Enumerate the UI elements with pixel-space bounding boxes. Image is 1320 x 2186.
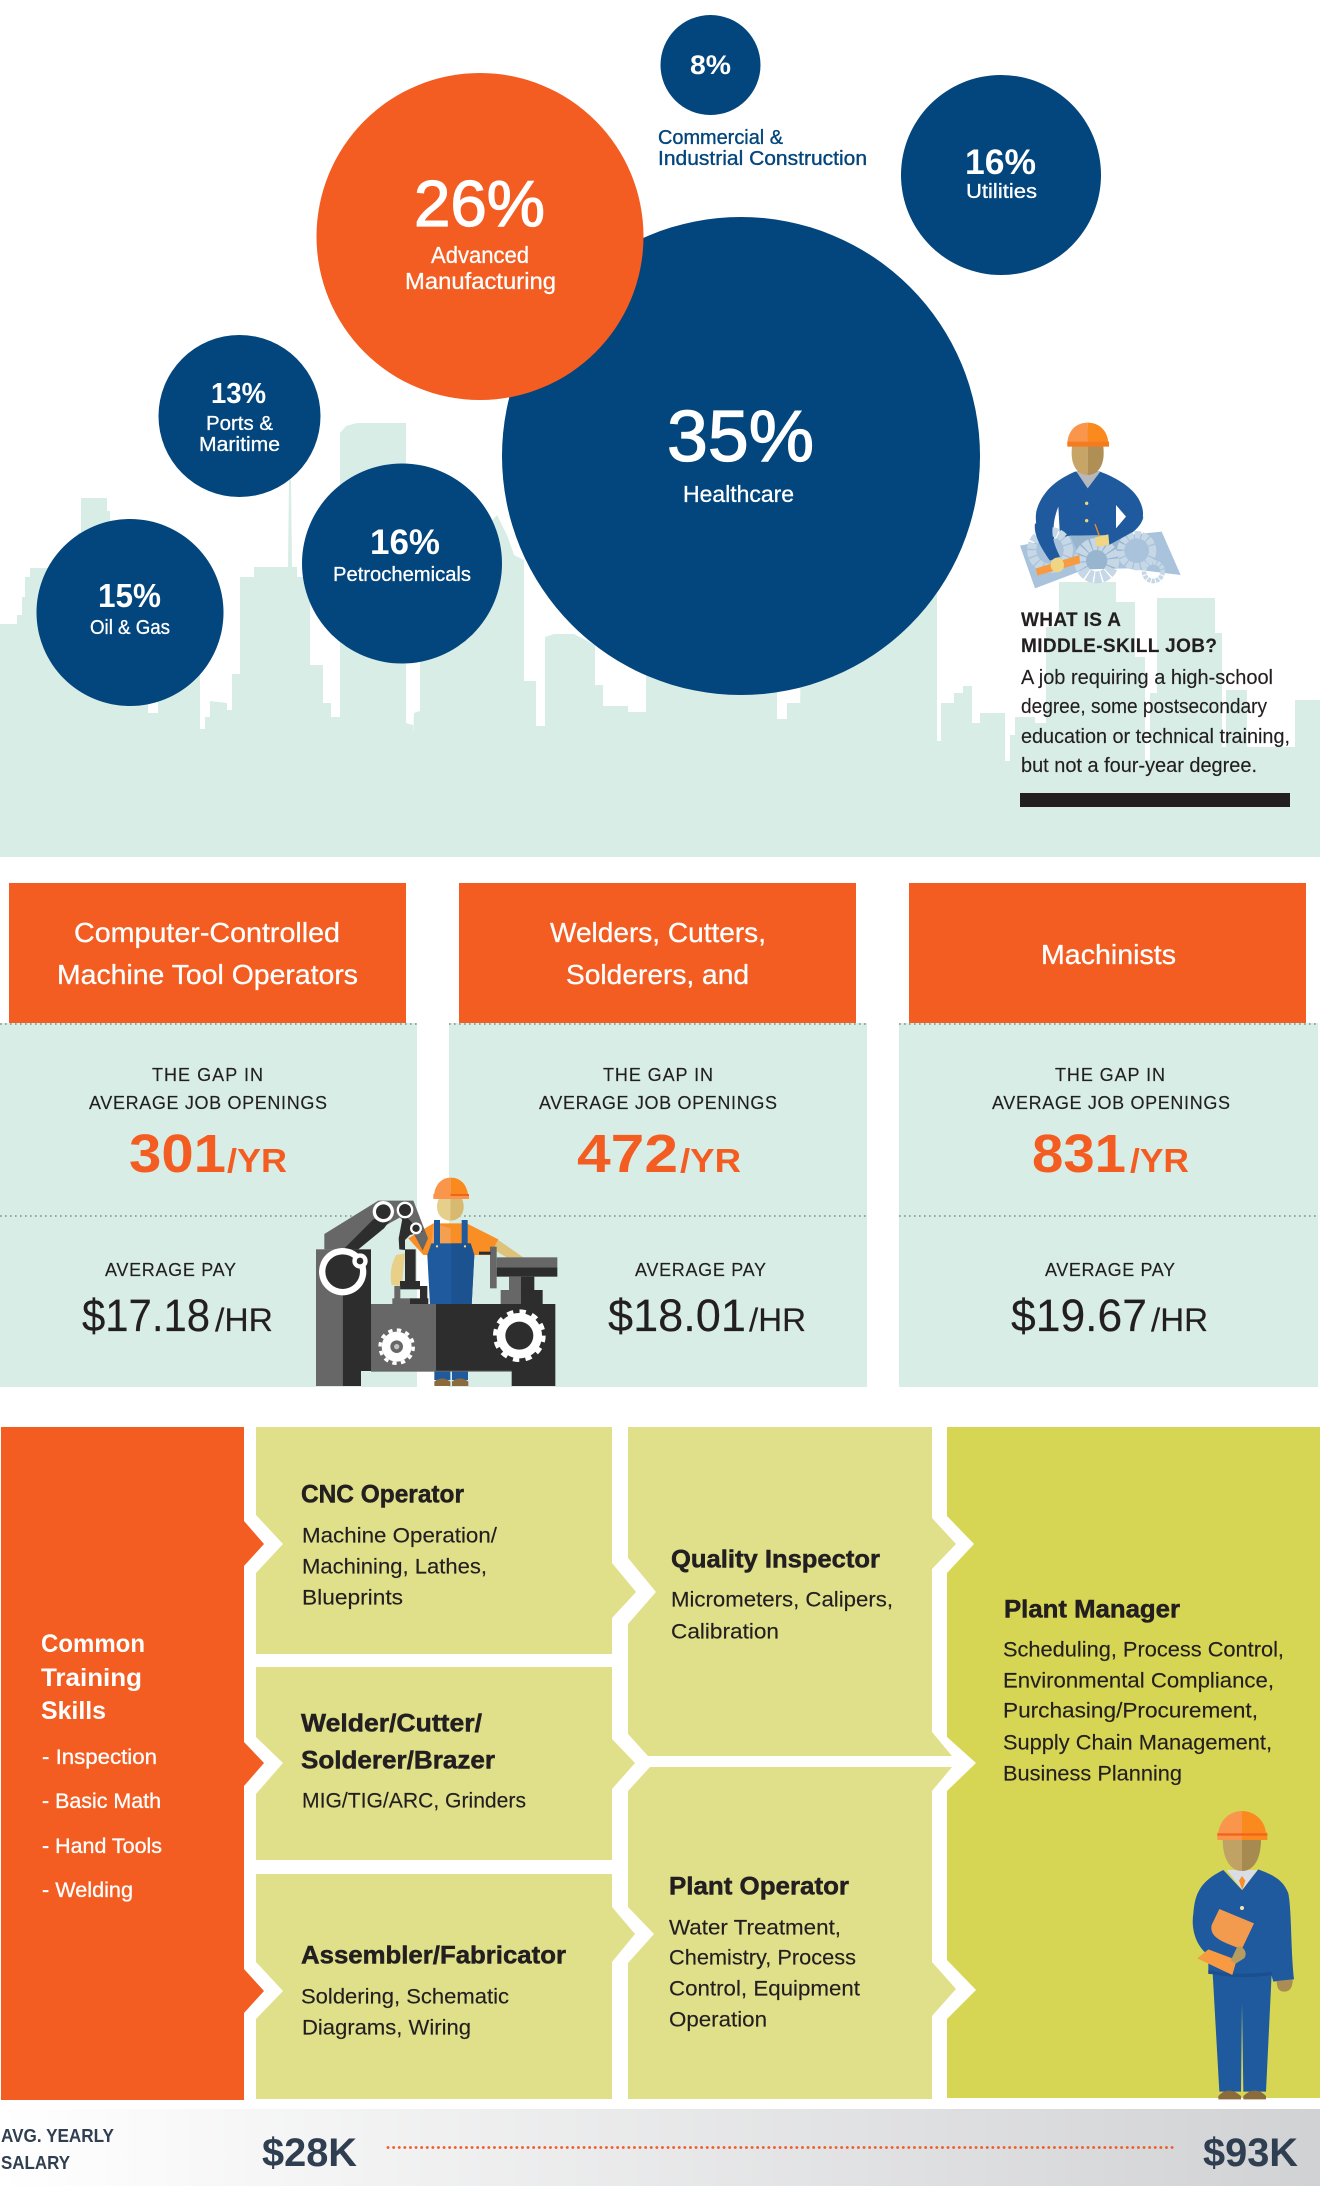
city skyline background (0, 423, 1320, 857)
bubble: Utilities 16%: Utilities (966, 181, 1037, 203)
panel: Machinists: AVERAGE JOB OPENINGS (992, 1093, 1230, 1113)
bubble: Oil and Gas 15% (36, 519, 224, 706)
panel: Assembler/Fabricator (256, 1874, 635, 2099)
panel: Computer-Controlled Machine Tool Operators: THE GAP IN (152, 1065, 263, 1085)
panel: Computer-Controlled Machine Tool Operators (0, 883, 417, 1387)
panel: common training skills: - Inspection (42, 1745, 157, 1769)
panel: Machinists: /HR (1151, 1302, 1208, 1338)
bubble: Utilities 16% (901, 75, 1101, 275)
callout: what is a middle-skill job (1020, 610, 1290, 807)
bubble: Ports and Maritime 13%: Ports & (206, 413, 274, 435)
bubble: Petrochemicals 16%: 16% (370, 523, 440, 562)
panel: CNC Operator: Machine Operation/ (302, 1523, 497, 1547)
salary bar: $93K (1203, 2131, 1298, 2175)
salary bar: $28K (262, 2131, 357, 2175)
panel: common training skills: - Hand Tools (42, 1834, 162, 1858)
panel: common training skills: - Welding (42, 1878, 133, 1902)
panel: Quality Inspector (628, 1427, 956, 1756)
callout: what is a middle-skill job: WHAT IS A (1021, 610, 1121, 631)
callout: what is a middle-skill job: education or technical training, (1021, 726, 1290, 748)
panel: Welder/Cutter/Solderer/Brazer: Welder/Cutter/ (301, 1709, 482, 1737)
panel: Computer-Controlled Machine Tool Operators: /YR (227, 1142, 287, 1179)
bubble: Advanced Manufacturing 26%: Advanced (431, 242, 529, 268)
panel: Machinists: Machinists (1041, 939, 1176, 970)
panel: Welder/Cutter/Solderer/Brazer: MIG/TIG/ARC, Grinders (302, 1788, 526, 1812)
panel: Assembler/Fabricator: Assembler/Fabricator (301, 1941, 566, 1969)
bubble: Commercial and Industrial Construction 8%: 8% (690, 50, 731, 80)
panel: CNC Operator: Blueprints (302, 1585, 403, 1609)
panel: Computer-Controlled Machine Tool Operators: AVERAGE JOB OPENINGS (89, 1093, 327, 1113)
salary bar: SALARY (1, 2153, 70, 2173)
panel: Computer-Controlled Machine Tool Operators: 301 (129, 1124, 226, 1184)
bubble: Healthcare 35%: Healthcare (683, 481, 794, 507)
bubble: Utilities 16%: 16% (965, 143, 1036, 182)
callout: what is a middle-skill job: but not a four-year degree. (1021, 755, 1257, 777)
panel: Welders, Cutters, Solderers: 472 (577, 1124, 678, 1184)
panel: Welder/Cutter/Solderer/Brazer (256, 1667, 635, 1860)
bubble: Ports and Maritime 13% (158, 335, 320, 497)
panel: Plant Manager: Environmental Compliance, (1003, 1668, 1274, 1692)
panel: Computer-Controlled Machine Tool Operators: Machine Tool Operators (57, 959, 358, 990)
panel: Quality Inspector: Calibration (671, 1619, 779, 1643)
bubble: Petrochemicals 16% (302, 464, 502, 664)
icon: worker reading blueprint (1020, 423, 1181, 588)
salary bar: AVG. YEARLY (1, 2126, 114, 2146)
bubble: Commercial and Industrial Construction 8%: Commercial & (658, 127, 784, 149)
panel: Plant Manager: Scheduling, Process Control, (1003, 1637, 1284, 1661)
bubble: Advanced Manufacturing 26% (316, 73, 644, 400)
panel: Machinists (899, 883, 1318, 1387)
panel: Welders, Cutters, Solderers: AVERAGE PAY (635, 1260, 766, 1280)
panel: Computer-Controlled Machine Tool Operators: $17.18 (82, 1290, 210, 1341)
panel: Plant Operator: Water Treatment, (669, 1915, 841, 1939)
bubble: Healthcare 35% (502, 217, 980, 695)
icon: plant manager figure (1193, 1811, 1294, 2099)
panel: Machinists: THE GAP IN (1055, 1065, 1165, 1085)
callout: what is a middle-skill job: degree, some postsecondary (1021, 696, 1267, 718)
panel: Plant Manager: Business Planning (1003, 1761, 1182, 1785)
panel: Welders, Cutters, Solderers: /YR (680, 1142, 741, 1179)
bubble: Commercial and Industrial Construction 8%: Industrial Construction (658, 148, 867, 170)
panel: common training skills (1, 1427, 264, 2100)
panel: Welders, Cutters, Solderers: Solderers, and (566, 959, 749, 990)
panel: CNC Operator: CNC Operator (301, 1480, 464, 1508)
panel: Plant Manager: Plant Manager (1004, 1595, 1180, 1623)
bubble: Petrochemicals 16%: Petrochemicals (333, 564, 471, 586)
panel: Plant Manager (947, 1427, 1320, 2098)
bubble: Oil and Gas 15%: Oil & Gas (90, 617, 170, 639)
panel: Assembler/Fabricator: Soldering, Schematic (301, 1984, 509, 2008)
salary bar (0, 2109, 1320, 2186)
panel: Computer-Controlled Machine Tool Operators: /HR (215, 1302, 273, 1338)
bubble: Advanced Manufacturing 26%: 26% (414, 167, 545, 240)
panel: Welder/Cutter/Solderer/Brazer: Solderer/Brazer (301, 1746, 495, 1774)
panel: CNC Operator: Machining, Lathes, (302, 1554, 487, 1578)
panel: Welders, Cutters, Solderers: $18.01 (608, 1290, 746, 1341)
panel: Assembler/Fabricator: Diagrams, Wiring (302, 2015, 471, 2039)
panel: Machinists: $19.67 (1011, 1290, 1147, 1341)
panel: Welders, Cutters, Solderers: /HR (749, 1302, 806, 1338)
panel: Machinists: 831 (1032, 1124, 1126, 1184)
panel: Plant Operator (628, 1767, 956, 2099)
panel: Quality Inspector: Micrometers, Calipers, (671, 1587, 893, 1611)
callout: what is a middle-skill job: A job requiring a high-school (1021, 667, 1273, 689)
panel: Plant Operator: Operation (669, 2007, 767, 2031)
panel: Plant Operator: Control, Equipment (669, 1976, 860, 2000)
panel: Plant Manager: Purchasing/Procurement, (1003, 1698, 1258, 1722)
panel: CNC Operator (256, 1427, 636, 1654)
panel: Welders, Cutters, Solderers: THE GAP IN (603, 1065, 713, 1085)
callout: what is a middle-skill job: MIDDLE-SKILL JOB? (1021, 636, 1217, 657)
panel: Welders, Cutters, Solderers: AVERAGE JOB OPENINGS (539, 1093, 777, 1113)
bubble: Ports and Maritime 13%: 13% (211, 378, 266, 410)
panel: Plant Operator: Chemistry, Process (669, 1945, 856, 1969)
panel: Computer-Controlled Machine Tool Operators: Computer-Controlled (74, 917, 340, 948)
panel: common training skills: Training (41, 1664, 142, 1692)
panel: Plant Manager: Supply Chain Management, (1003, 1730, 1272, 1754)
bubble: Oil and Gas 15%: 15% (98, 577, 161, 614)
panel: Welders, Cutters, Solderers (449, 883, 867, 1387)
bubble: Ports and Maritime 13%: Maritime (199, 434, 280, 456)
bubble: Commercial and Industrial Construction 8% (658, 15, 867, 170)
panel: Quality Inspector: Quality Inspector (671, 1545, 880, 1573)
panel: common training skills: Skills (41, 1697, 106, 1725)
panel: Welders, Cutters, Solderers: Welders, Cutters, (550, 917, 766, 948)
panel: common training skills: - Basic Math (42, 1789, 161, 1813)
panel: Computer-Controlled Machine Tool Operators: AVERAGE PAY (105, 1260, 236, 1280)
icon: machinist at machine (316, 1178, 557, 1386)
panel: Plant Operator: Plant Operator (669, 1872, 849, 1900)
bubble: Healthcare 35%: 35% (667, 397, 814, 477)
bubble: Advanced Manufacturing 26%: Manufacturing (405, 268, 556, 294)
panel: Machinists: /YR (1130, 1142, 1189, 1179)
panel: common training skills: Common (41, 1630, 145, 1658)
panel: Machinists: AVERAGE PAY (1045, 1260, 1175, 1280)
